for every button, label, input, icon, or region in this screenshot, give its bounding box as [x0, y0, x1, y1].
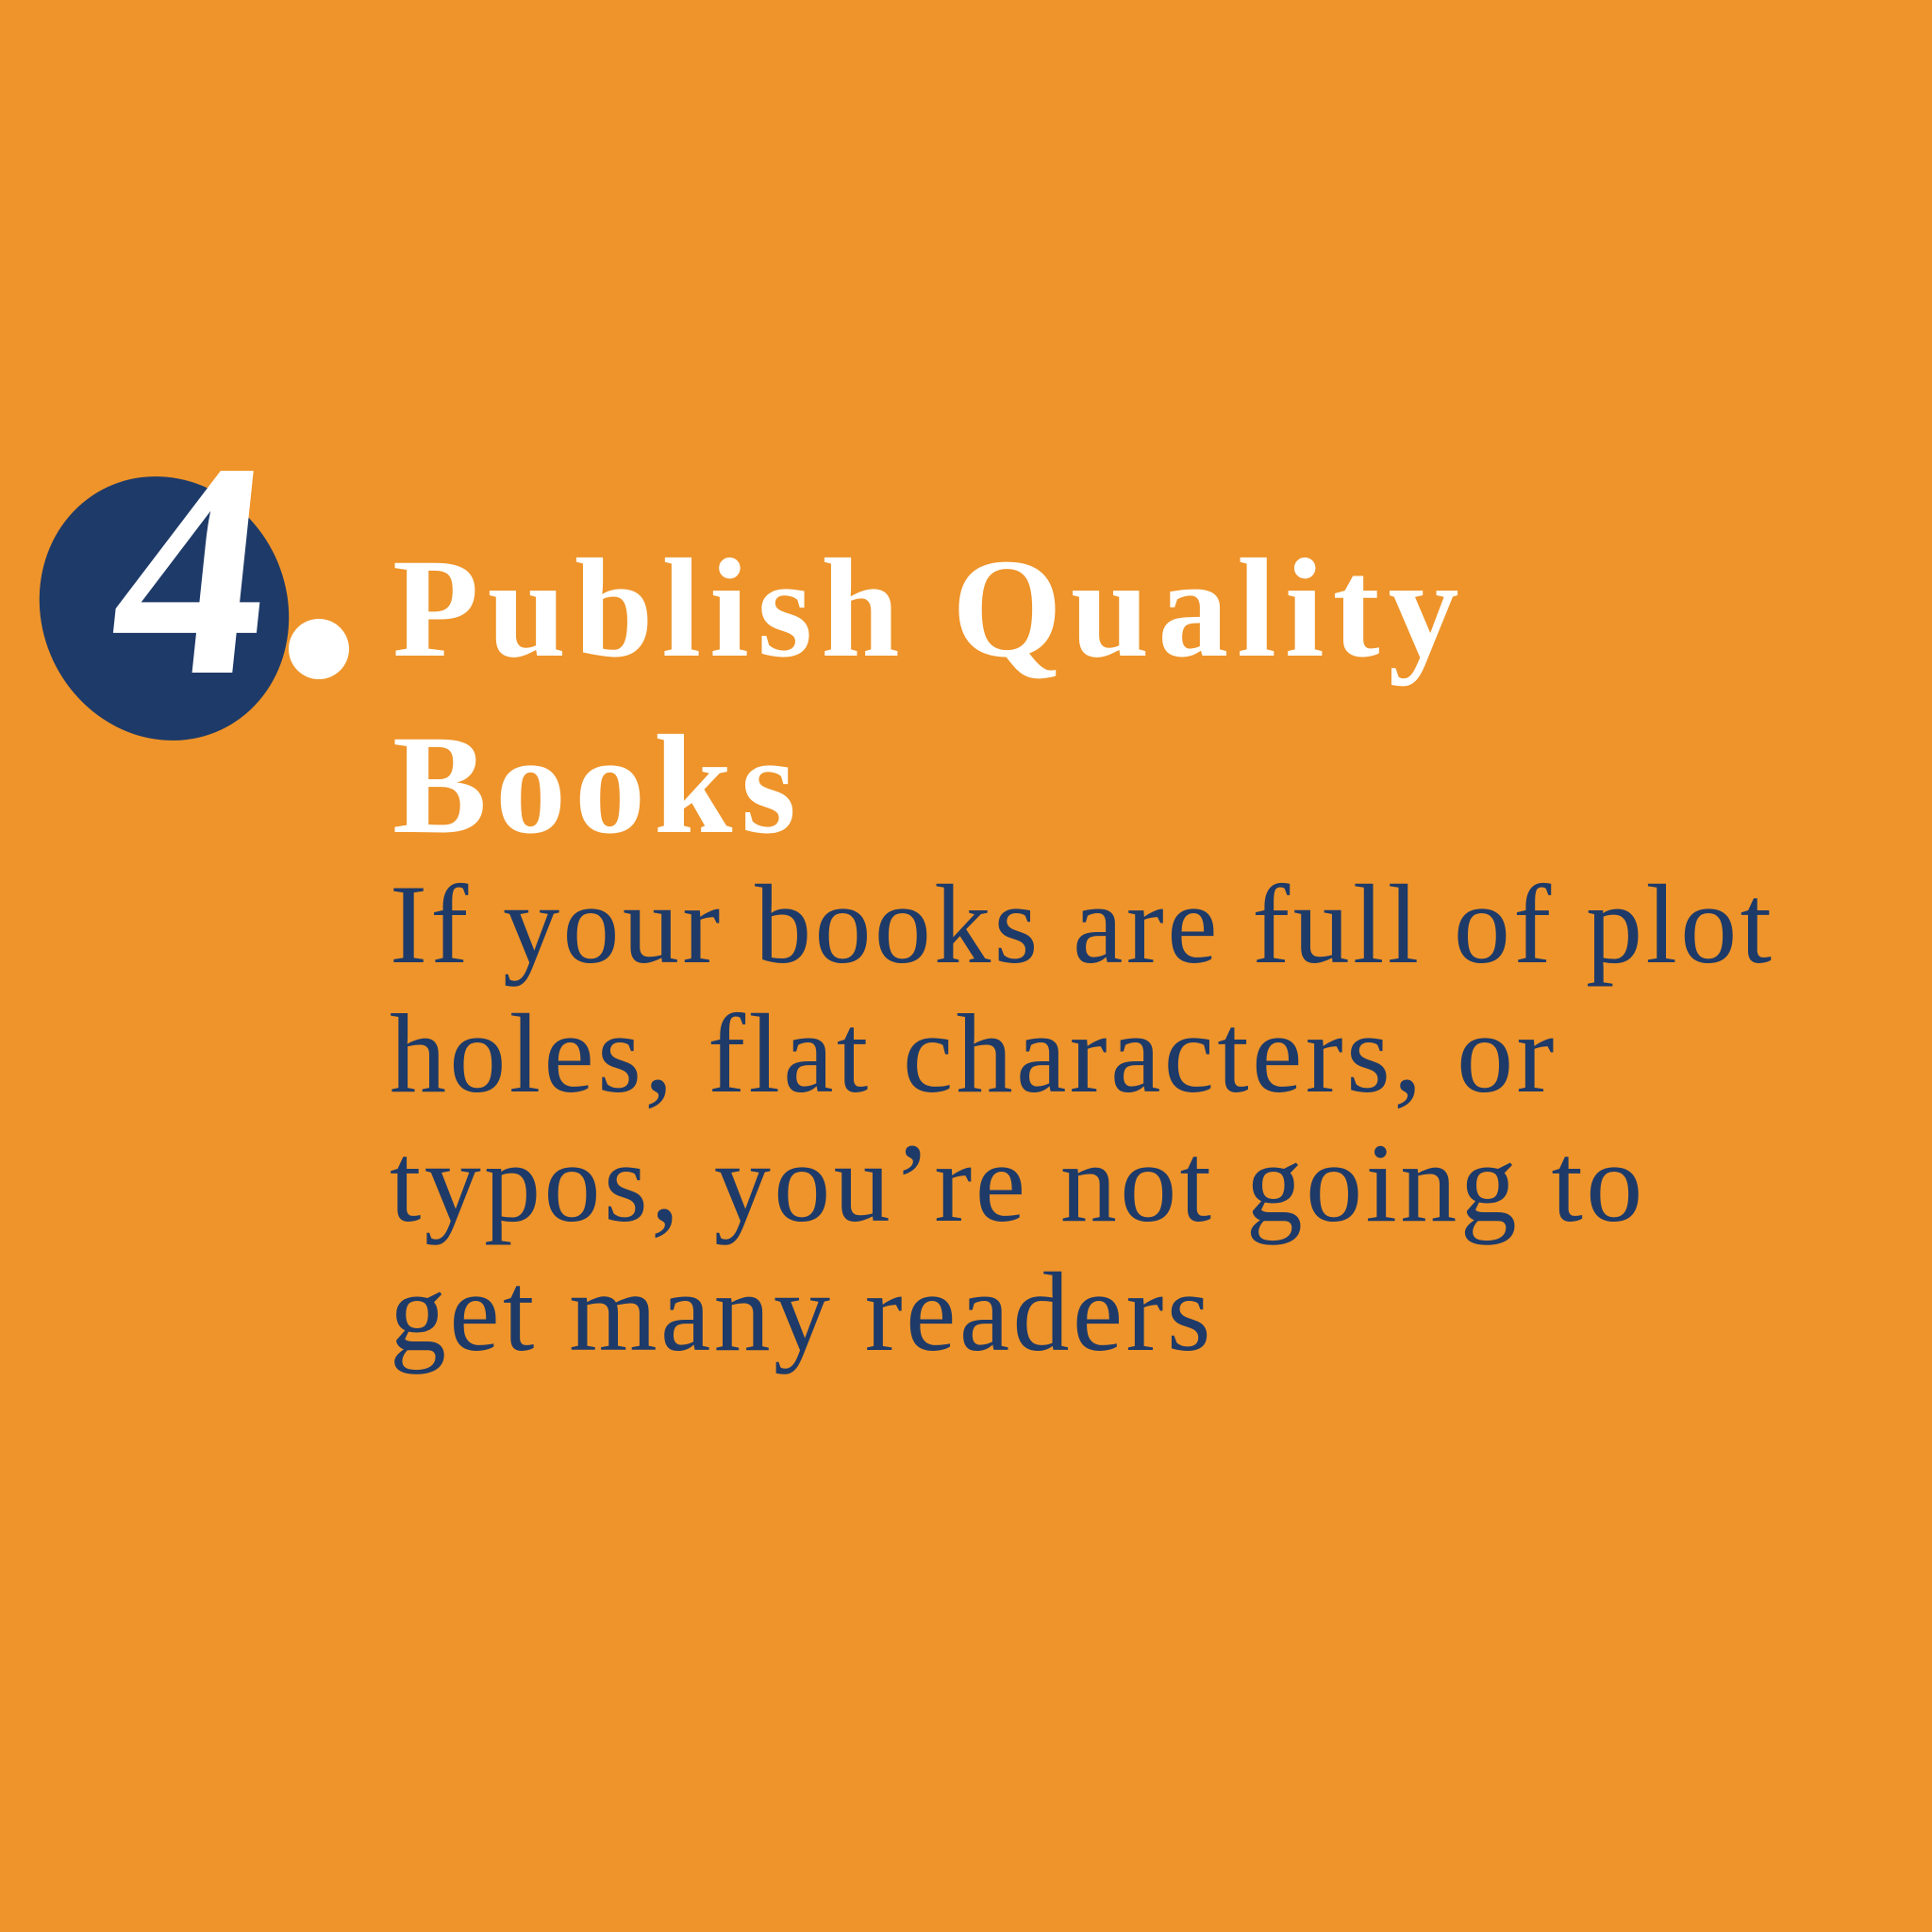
title — [392, 530, 1468, 863]
navy blob — [0, 435, 332, 782]
body text: holes, flat characters, or — [390, 991, 1557, 1116]
body text — [390, 861, 1774, 1374]
body text: typos, you’re not going to — [390, 1120, 1646, 1245]
body text: get many readers — [390, 1249, 1214, 1374]
body text: If your books are full of plot — [390, 861, 1774, 987]
period — [289, 619, 349, 679]
icon: number badge — [40, 462, 349, 741]
title: Books — [392, 707, 805, 863]
title: Publish Quality — [392, 530, 1468, 687]
